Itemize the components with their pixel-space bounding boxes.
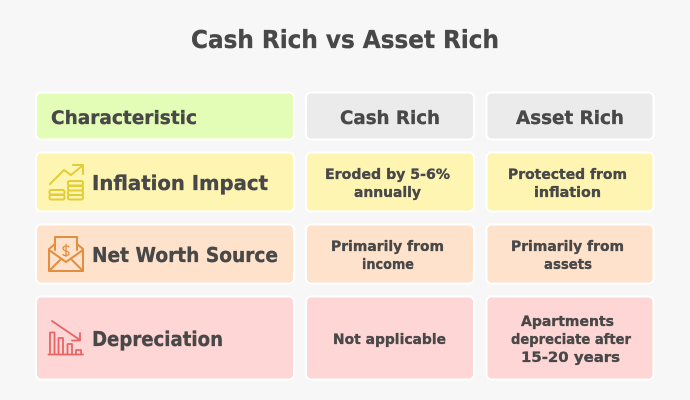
row: inflation impact: Inflation Impact bbox=[92, 171, 268, 195]
icon: rising chart with coins bbox=[50, 165, 83, 200]
cell: cash rich inflation bbox=[306, 152, 474, 212]
cell: asset rich depreciation: 15-20 years bbox=[521, 350, 620, 366]
header: characteristic: Characteristic bbox=[51, 107, 197, 129]
row: depreciation bbox=[36, 296, 294, 380]
cell: cash rich net worth bbox=[306, 224, 474, 284]
icon: falling bar chart bbox=[48, 321, 83, 354]
row: net worth source bbox=[36, 224, 294, 284]
header: asset rich: Asset Rich bbox=[516, 107, 624, 129]
header: characteristic bbox=[36, 92, 294, 140]
cell: asset rich depreciation: depreciate after bbox=[511, 332, 631, 348]
cell: asset rich net worth bbox=[486, 224, 654, 284]
cell: cash rich net worth: Primarily from bbox=[331, 239, 444, 255]
cell: asset rich depreciation: Apartments bbox=[521, 314, 614, 330]
header: cash rich: Cash Rich bbox=[340, 107, 440, 129]
row: inflation impact bbox=[36, 152, 294, 212]
cell: asset rich net worth: Primarily from bbox=[511, 239, 624, 255]
cell: asset rich depreciation bbox=[486, 296, 654, 380]
cell: asset rich inflation: Protected from bbox=[508, 167, 627, 183]
cell: cash rich inflation: Eroded by 5-6% bbox=[325, 167, 450, 183]
cell: cash rich net worth: income bbox=[362, 257, 414, 273]
cell: asset rich inflation bbox=[486, 152, 654, 212]
cell: cash rich depreciation: Not applicable bbox=[333, 332, 446, 348]
header: cash rich bbox=[306, 92, 474, 140]
row: depreciation: Depreciation bbox=[92, 327, 223, 351]
row: net worth source: Net Worth Source bbox=[92, 243, 278, 267]
cell: asset rich net worth: assets bbox=[544, 257, 592, 273]
title: Cash Rich vs Asset Rich bbox=[191, 25, 499, 54]
cell: cash rich inflation: annually bbox=[354, 185, 421, 201]
cell: asset rich inflation: inflation bbox=[534, 185, 601, 201]
header: asset rich bbox=[486, 92, 654, 140]
icon: envelope with dollar bbox=[49, 237, 83, 271]
cell: cash rich depreciation bbox=[306, 296, 474, 380]
